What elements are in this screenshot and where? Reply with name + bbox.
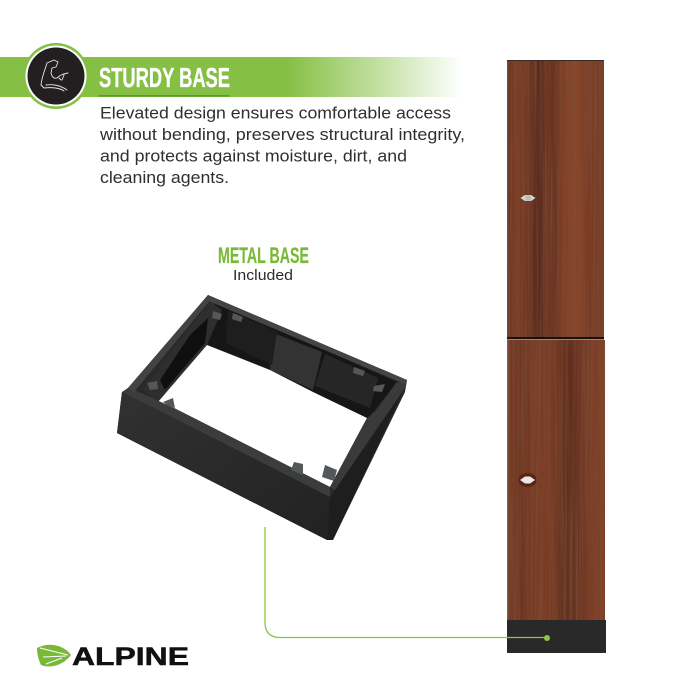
locker xyxy=(507,60,606,653)
body text block: and protects against moisture, dirt, and xyxy=(100,146,407,166)
green header banner xyxy=(0,57,462,97)
metal base photo xyxy=(117,295,407,540)
icon: upper lock xyxy=(520,195,536,201)
label: metal base included xyxy=(218,243,309,284)
front and right rim xyxy=(122,388,330,497)
heading: sturdy base: STURDY BASE xyxy=(99,62,230,93)
wordmark: ALPINE xyxy=(72,643,189,671)
body text block: without bending, preserves structural integrity, xyxy=(99,125,465,144)
right outer face xyxy=(327,383,407,540)
heading: sturdy base xyxy=(99,62,230,97)
left wall interior xyxy=(143,301,222,402)
lower locker door xyxy=(507,340,605,620)
alpine logo xyxy=(37,643,189,671)
door gap xyxy=(507,337,604,340)
body text block xyxy=(99,104,465,187)
back wall interior xyxy=(207,301,397,420)
mounting tabs xyxy=(147,311,385,481)
icon: leaf xyxy=(37,645,71,667)
white opening xyxy=(158,345,367,487)
black metal base on locker xyxy=(507,620,606,653)
front face panel xyxy=(117,392,330,540)
connector line to locker base xyxy=(265,527,550,641)
icon: lower lock xyxy=(518,473,536,487)
body text block: cleaning agents. xyxy=(100,168,229,187)
silhouette of base frame xyxy=(117,295,407,540)
body text block: Elevated design ensures comfortable access xyxy=(100,104,451,122)
label: metal base included: Included xyxy=(233,267,293,284)
icon: flexed arm badge xyxy=(23,43,89,109)
label: metal base included: METAL BASE xyxy=(218,243,309,268)
upper locker door xyxy=(507,60,604,338)
